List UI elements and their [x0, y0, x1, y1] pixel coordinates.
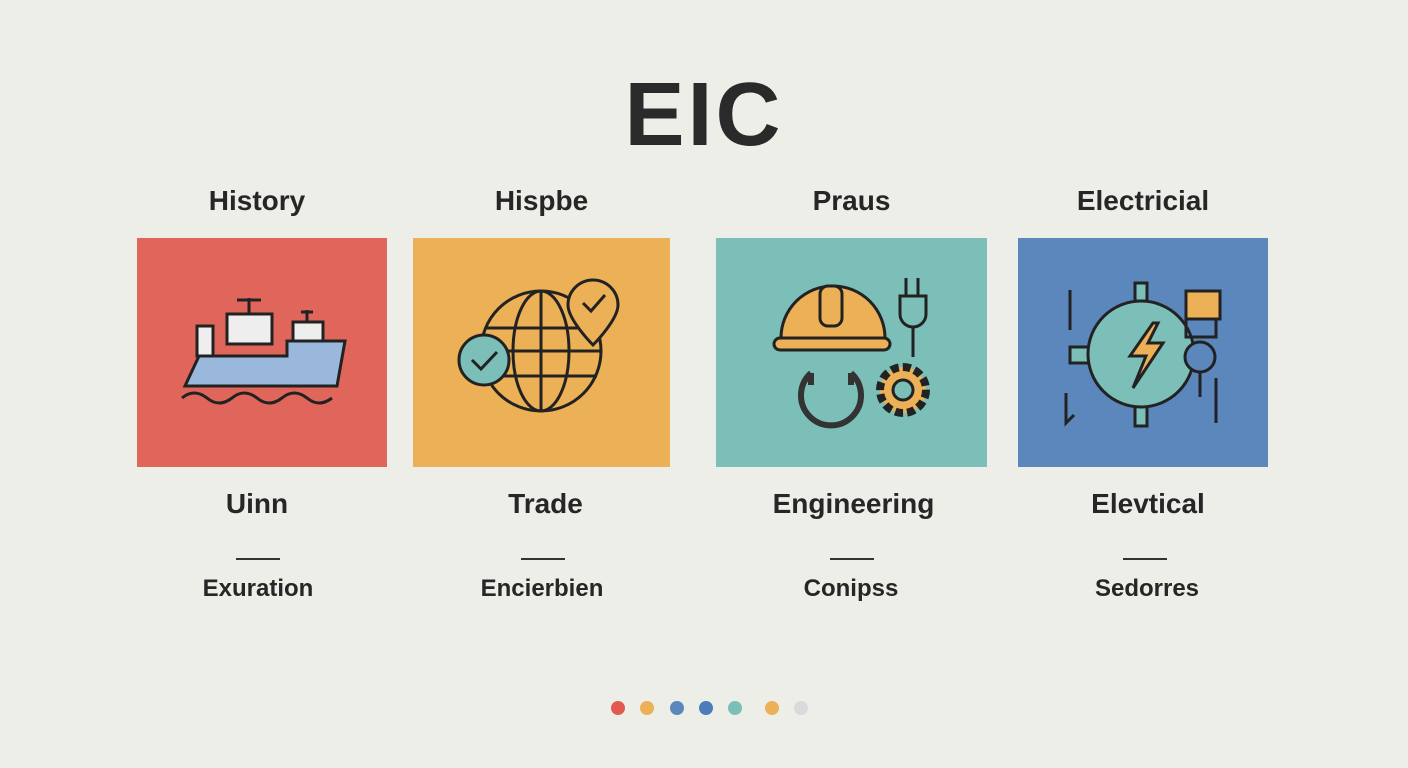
label: Uinn: Uinn: [226, 488, 288, 519]
panel: engineering: [716, 238, 987, 467]
label: Elevtical: Elevtical: [1091, 488, 1205, 519]
icon: ship: [182, 298, 345, 403]
title: EIC: [624, 65, 784, 165]
heading: Hispbe: Hispbe: [495, 185, 588, 216]
pagination dots: [611, 701, 808, 715]
sublabel: Encierbien: Encierbien: [481, 575, 603, 602]
heading: Electricial: Electricial: [1077, 185, 1209, 216]
panel: globe: [413, 238, 670, 467]
heading: Praus: Praus: [813, 185, 890, 216]
heading: History: History: [209, 185, 305, 216]
icon: gear with bolt: [1066, 283, 1220, 426]
icon: hard hat, plug, gear: [774, 278, 926, 425]
sublabel: Conipss: Conipss: [804, 575, 898, 602]
sublabel: Exuration: Exuration: [203, 575, 313, 602]
sublabel: Sedorres: Sedorres: [1095, 575, 1199, 602]
label: Trade: Trade: [508, 488, 583, 519]
label: Engineering: Engineering: [773, 488, 934, 519]
panel: electrical: [1018, 238, 1268, 467]
panel: ship: [137, 238, 387, 467]
icon: globe with checks: [459, 280, 618, 411]
